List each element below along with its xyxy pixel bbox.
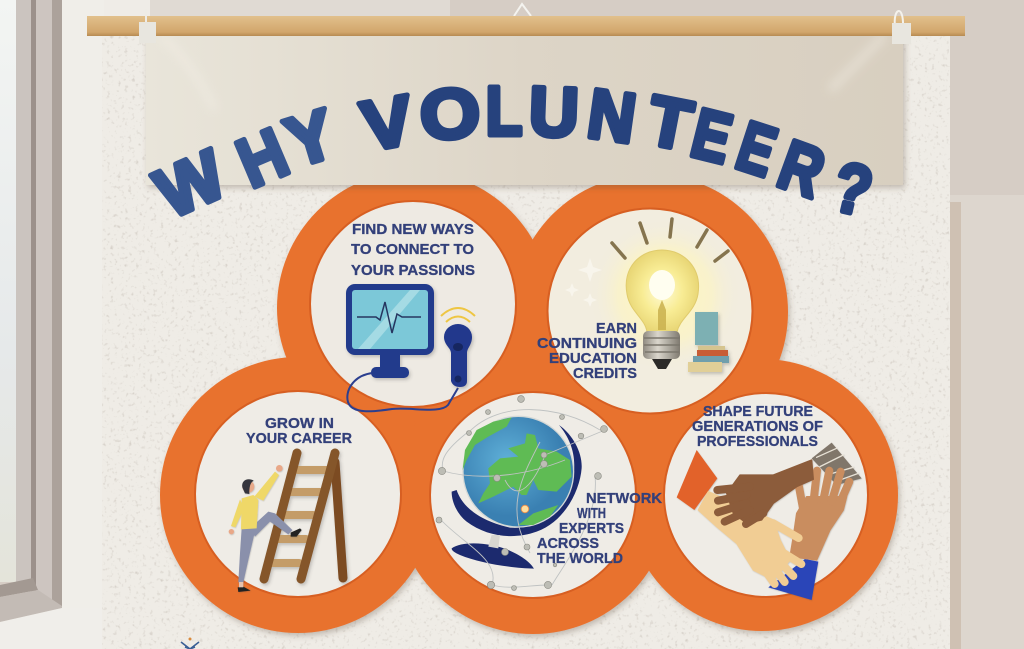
panel: shape future generations of professionals — [677, 403, 862, 600]
heading: career: YOUR CAREER — [246, 430, 352, 447]
heading: network — [537, 490, 662, 567]
panel: grow in your career — [229, 415, 352, 592]
panel: earn continuing education credits — [537, 217, 743, 382]
network nodes and links — [436, 396, 608, 590]
heading: credits: CREDITS — [573, 365, 637, 382]
banner clips and hooks — [139, 9, 911, 44]
heading: credits: CONTINUING — [537, 335, 637, 352]
title: why volunteer: W — [144, 135, 236, 233]
title: why volunteer: R — [769, 125, 835, 213]
icon: light bulb with rays — [565, 219, 728, 369]
heading: network: EXPERTS — [559, 520, 624, 537]
title: why volunteer — [144, 72, 880, 233]
heading: network: ACROSS — [537, 535, 599, 552]
icon: ladder — [264, 453, 343, 579]
heading: passions: TO CONNECT TO — [351, 241, 474, 258]
title: why volunteer: O — [418, 73, 482, 155]
textured wall panel — [102, 30, 950, 649]
heading: network: THE WORLD — [537, 550, 623, 567]
wooden rod — [87, 16, 965, 36]
heading: professionals: SHAPE FUTURE — [703, 403, 813, 420]
title: why volunteer: ? — [826, 147, 880, 231]
orange linked ring frame — [160, 171, 898, 634]
panel: network with experts across the world — [436, 396, 662, 590]
title: why volunteer: E — [684, 95, 739, 179]
title: why volunteer: H — [227, 114, 299, 203]
heading: network: NETWORK — [586, 490, 662, 507]
icon: ultrasound probe with cable — [347, 308, 475, 411]
heading: credits: EARN — [596, 320, 637, 337]
heading: career — [246, 415, 352, 447]
hanging hook — [514, 4, 531, 16]
heading: credits: EDUCATION — [549, 350, 637, 367]
title: why volunteer: L — [486, 72, 522, 150]
heading: professionals: PROFESSIONALS — [697, 433, 818, 450]
heading: professionals — [692, 403, 823, 450]
title: why volunteer: U — [528, 72, 580, 152]
canvas banner — [146, 24, 903, 185]
icon: monitor with heartbeat — [346, 284, 434, 378]
title: why volunteer: T — [641, 81, 698, 165]
title: why volunteer: E — [728, 107, 785, 192]
heading: network: WITH — [577, 505, 606, 522]
title: why volunteer: N — [583, 75, 640, 158]
icon: stack of books — [688, 312, 729, 372]
heading: passions: YOUR PASSIONS — [351, 262, 475, 279]
window — [0, 0, 102, 649]
heading: credits — [537, 320, 637, 382]
heading: professionals: GENERATIONS OF — [692, 418, 823, 435]
title: why volunteer: V — [356, 80, 419, 166]
panel: find new ways to connect to your passions — [346, 221, 475, 411]
icon: climbing person — [229, 465, 302, 592]
small bottom icon — [181, 638, 199, 649]
icon: globe on stand — [452, 416, 582, 569]
heading: passions: FIND NEW WAYS — [352, 221, 474, 238]
heading: passions — [351, 221, 475, 279]
heading: career: GROW IN — [265, 415, 334, 432]
icon: three joined hands — [677, 443, 862, 600]
light glow — [587, 217, 743, 373]
title: why volunteer: Y — [277, 94, 344, 182]
